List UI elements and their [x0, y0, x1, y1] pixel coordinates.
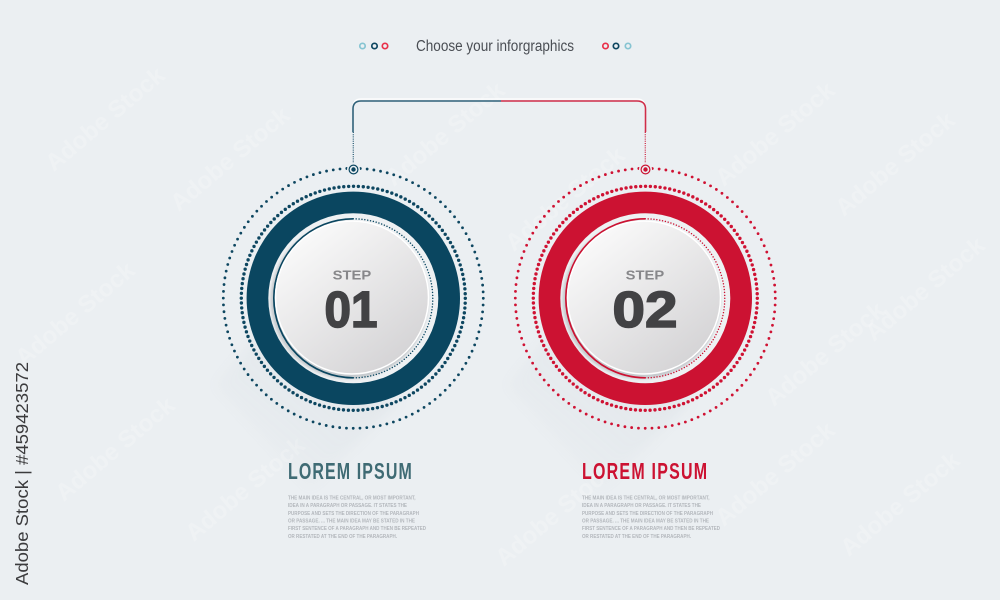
step 2 paragraph — [582, 496, 720, 540]
heading: Choose your inforgraphics — [416, 38, 574, 55]
white disc — [568, 221, 720, 374]
pale inner ring — [268, 213, 438, 383]
watermark pattern: Adobe Stock — [860, 231, 991, 347]
step 2 paragraph: FIRST SENTENCE OF A PARAGRAPH AND THEN BE REPEATED — [582, 526, 720, 532]
long shadow — [215, 330, 400, 490]
half solid arc — [566, 219, 645, 378]
step 2 heading: LOREM IPSUM — [582, 459, 707, 485]
header with dot groups — [360, 38, 631, 55]
step 1 paragraph: OR PASSAGE. ... THE MAIN IDEA MAY BE STATED IN THE — [288, 518, 416, 524]
step label: STEP — [626, 267, 665, 282]
step 1 paragraph: FIRST SENTENCE OF A PARAGRAPH AND THEN BE REPEATED — [288, 526, 426, 532]
right dots — [603, 43, 631, 49]
watermark pattern: Adobe Stock — [710, 416, 841, 532]
outer dotted ring — [223, 168, 483, 428]
half solid arc — [274, 219, 353, 378]
long shadow — [507, 330, 692, 490]
step 1 circle — [215, 163, 483, 490]
watermark pattern: Adobe Stock — [760, 296, 891, 412]
outer dotted ring — [515, 168, 775, 428]
step 1 paragraph: OR RESTATED AT THE END OF THE PARAGRAPH. — [288, 534, 398, 540]
watermark pattern: Adobe Stock — [835, 446, 966, 562]
connector between steps — [353, 99, 646, 165]
step 2 circle — [507, 163, 775, 490]
step label: STEP — [333, 267, 372, 282]
watermark pattern: Adobe Stock — [165, 101, 296, 217]
step 1 paragraph: PURPOSE AND SETS THE DIRECTION OF THE PARAGRAPH — [288, 511, 419, 517]
half dotted arc — [353, 219, 433, 378]
half dotted arc — [645, 219, 725, 378]
step 2 paragraph: THE MAIN IDEA IS THE CENTRAL, OR MOST IMPORTANT, — [582, 496, 710, 502]
thick ring — [247, 192, 460, 405]
step 2 paragraph: OR PASSAGE. ... THE MAIN IDEA MAY BE STATED IN THE — [582, 518, 710, 524]
step 1 paragraph: THE MAIN IDEA IS THE CENTRAL, OR MOST IMPORTANT, — [288, 496, 416, 502]
watermark pattern: Adobe Stock — [710, 76, 841, 192]
watermark pattern: Adobe Stock — [10, 256, 141, 372]
step 1 paragraph — [288, 496, 426, 540]
watermark pattern: Adobe Stock — [380, 76, 511, 192]
step number: 02 — [612, 281, 678, 338]
thick ring — [539, 192, 752, 405]
pale inner ring — [560, 213, 730, 383]
step 2 paragraph: OR RESTATED AT THE END OF THE PARAGRAPH. — [582, 534, 692, 540]
watermark pattern: Adobe Stock — [40, 61, 171, 177]
connector node — [639, 163, 652, 176]
inner dotted ring — [533, 186, 757, 410]
left dots — [360, 43, 388, 49]
connector node — [347, 163, 360, 176]
inner dotted ring — [241, 186, 465, 410]
crescent shadow — [270, 221, 428, 379]
white disc — [276, 221, 428, 374]
step 2 paragraph: PURPOSE AND SETS THE DIRECTION OF THE PARAGRAPH — [582, 511, 713, 517]
watermark pattern: Adobe Stock — [490, 456, 621, 572]
step number: 01 — [324, 281, 378, 338]
watermark pattern: Adobe Stock — [180, 431, 311, 547]
step 1 paragraph: IDEA IN A PARAGRAPH OR PASSAGE. IT STATES THE — [288, 503, 408, 509]
step 1 heading: LOREM IPSUM — [288, 459, 412, 485]
watermark pattern: Adobe Stock — [830, 106, 961, 222]
watermark pattern: Adobe Stock — [500, 141, 631, 257]
crescent shadow — [562, 221, 720, 379]
step 2 paragraph: IDEA IN A PARAGRAPH OR PASSAGE. IT STATES THE — [582, 503, 702, 509]
watermark pattern: Adobe Stock — [50, 391, 181, 507]
stock id vertical text: Adobe Stock | #459423572 — [12, 362, 32, 585]
